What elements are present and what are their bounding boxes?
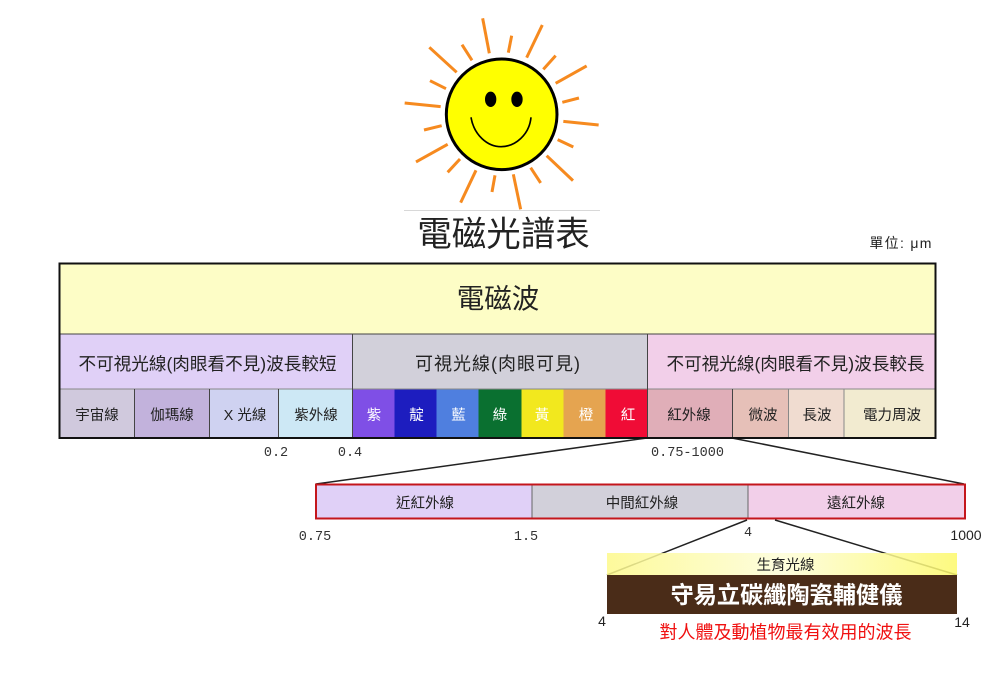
spectrum cells: 紫 (367, 407, 381, 424)
unit label: 單位: μm (869, 235, 933, 251)
table rules (60, 334, 935, 438)
connector lines: growth light zoom (607, 520, 957, 575)
band: invisible long wavelength (648, 334, 936, 389)
sun rays (405, 18, 599, 209)
scale labels: growth light: 4 (598, 613, 606, 629)
scale labels: infrared (299, 526, 982, 545)
band: invisible long wavelength: 不可視光線(肉眼看不見)波長較長 (666, 354, 925, 374)
scale labels: growth light: 14 (954, 614, 970, 630)
spectrum cells: 橙 (579, 407, 594, 424)
title: 電磁光譜表 (417, 216, 590, 254)
panel: infrared breakdown (316, 484, 965, 518)
spectrum cells: 電力周波 (863, 407, 921, 424)
scale labels: main spectrum: 0.4 (338, 446, 362, 461)
far infrared: 遠紅外線 (827, 495, 885, 512)
scale labels: main spectrum: 0.2 (264, 446, 288, 461)
mid infrared: 中間紅外線 (606, 495, 678, 512)
band: invisible short wavelength: 不可視光線(肉眼看不見)波長較短 (78, 354, 337, 374)
band: visible light: 可視光線(肉眼可見) (415, 354, 581, 374)
spectrum cells: X 光線 (224, 407, 266, 424)
scale labels: growth light (598, 613, 970, 630)
spectrum cells: 紅外線 (667, 407, 711, 424)
scale labels: main spectrum (264, 446, 724, 461)
scale labels: infrared: 0.75 (299, 530, 331, 545)
heading cell: electromagnetic waves (60, 264, 935, 334)
spectrum cells: 紅 (621, 407, 635, 424)
scale labels: infrared: 4 (744, 526, 752, 541)
band: invisible short wavelength (60, 334, 352, 389)
growth light label: 生育光線 (756, 557, 814, 574)
spectrum cells: 伽瑪線 (150, 407, 194, 424)
panel: growth light band (607, 553, 957, 614)
mid infrared (532, 485, 748, 518)
spectrum cells: 綠 (493, 407, 507, 424)
far infrared (748, 485, 964, 518)
near infrared (316, 485, 532, 518)
table border (60, 264, 936, 438)
spectrum cells: 黃 (535, 407, 549, 424)
spectrum cells: 宇宙線 (75, 407, 119, 424)
growth light label (607, 553, 957, 575)
sun face (446, 59, 557, 170)
connector lines: infrared zoom (316, 438, 964, 484)
spectrum cells: 靛 (409, 407, 424, 424)
icon: smiling sun (405, 18, 599, 209)
scale labels: infrared: 1.5 (514, 530, 538, 545)
spectrum cells: 紫外線 (294, 407, 338, 424)
panel: electromagnetic spectrum table (60, 264, 936, 438)
scale labels: infrared: 1000 (950, 527, 982, 543)
spectrum cells: 微波 (748, 407, 778, 424)
brand band (607, 575, 957, 614)
heading cell: electromagnetic waves: 電磁波 (457, 283, 539, 314)
spectrum cells: 長波 (802, 407, 832, 424)
spectrum cells: 藍 (451, 407, 466, 424)
scale labels: main spectrum: 0.75-1000 (651, 446, 724, 461)
brand band: 守易立碳纖陶瓷輔健儀 (671, 582, 902, 608)
callout: most effective wavelength: 對人體及動植物最有效用的波長 (660, 622, 912, 642)
near infrared: 近紅外線 (396, 495, 454, 512)
band: visible light (352, 334, 648, 389)
spectrum cells (60, 389, 935, 438)
